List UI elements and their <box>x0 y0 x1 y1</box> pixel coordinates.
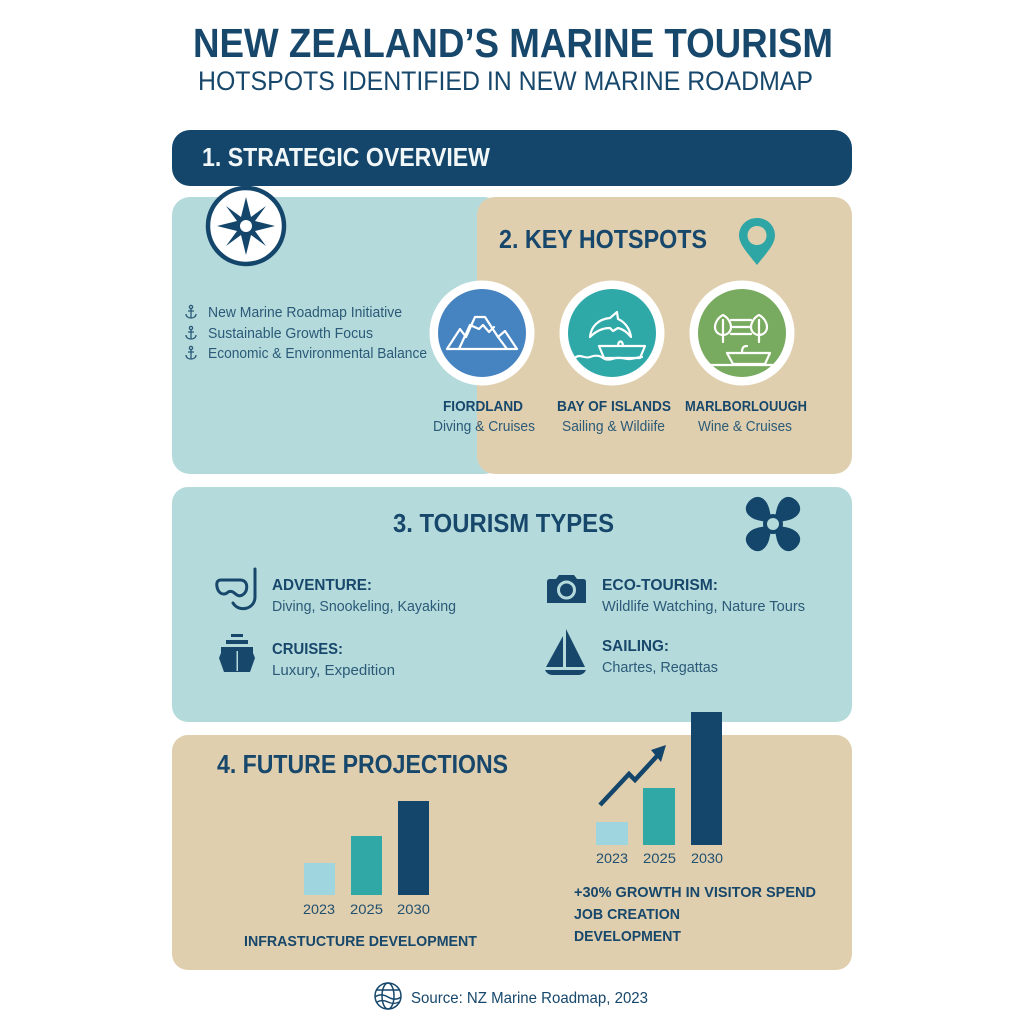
item: cruises <box>219 634 395 679</box>
hotspot: Marlborough: Wine & Cruises <box>698 419 792 435</box>
section header: strategic overview <box>172 130 852 186</box>
heading: key hotspots: 2. KEY HOTSPOTS <box>499 224 707 254</box>
heading: future projections: 4. FUTURE PROJECTIONS <box>217 749 508 779</box>
item: sailing: Chartes, Regattas <box>602 660 718 676</box>
bar chart: infrastructure: 2025 <box>350 901 383 917</box>
icon: camera <box>547 575 586 603</box>
bar chart: infrastructure: 2023 <box>303 901 335 917</box>
bullet: roadmap initiative: New Marine Roadmap Initiative <box>208 305 402 321</box>
icon: globe with waves <box>375 983 401 1009</box>
bar chart: visitor spend <box>596 712 723 866</box>
text block: growth outcomes: DEVELOPMENT <box>574 928 681 945</box>
item: adventure <box>217 569 456 615</box>
item: cruises: Luxury, Expedition <box>272 663 395 679</box>
icon: map pin <box>739 218 775 265</box>
hotspot: Fiordland <box>430 280 535 435</box>
text block: growth outcomes: +30% GROWTH IN VISITOR SPEND <box>574 884 816 901</box>
item: eco-tourism <box>547 575 805 615</box>
text block: growth outcomes: JOB CREATION <box>574 906 680 923</box>
title: NEW ZEALAND’S MARINE TOURISM <box>193 20 833 66</box>
item: adventure: ADVENTURE: <box>272 577 372 594</box>
bar chart: infrastructure <box>303 801 430 917</box>
text block: growth outcomes <box>574 884 816 945</box>
icon: cruise ship <box>219 634 255 672</box>
icon: propeller <box>742 493 804 555</box>
bar chart: visitor spend: 2025 <box>643 850 676 866</box>
panel: future projections <box>172 735 852 970</box>
icon: sailboat <box>545 629 586 675</box>
bar chart: visitor spend: 2030 <box>691 850 723 866</box>
hotspot: Bay of Islands <box>557 280 671 435</box>
hotspot: Fiordland: Diving & Cruises <box>433 419 535 435</box>
hotspot: Marlborough <box>685 280 807 435</box>
item: sailing: SAILING: <box>602 638 669 655</box>
caption: infrastructure development: INFRASTUCTURE DEVELOPMENT <box>244 933 477 950</box>
bullet: sustainable growth: Sustainable Growth Focus <box>208 326 373 342</box>
item: eco-tourism: ECO-TOURISM: <box>602 577 718 594</box>
hotspot: Fiordland: FIORDLAND <box>443 398 523 415</box>
item: adventure: Diving, Snookeling, Kayaking <box>272 599 456 615</box>
hotspot: Bay of Islands: BAY OF ISLANDS <box>557 398 671 415</box>
heading: tourism types: 3. TOURISM TYPES <box>393 508 614 538</box>
source line: Source: NZ Marine Roadmap, 2023 <box>411 990 648 1007</box>
icon: compass rose <box>208 188 284 264</box>
panel: key hotspots <box>430 197 852 474</box>
list: overview bullets <box>186 305 427 362</box>
panel: tourism types <box>172 487 852 722</box>
icon: snorkel mask <box>217 569 255 609</box>
hotspot: Bay of Islands: Sailing & Wildiife <box>562 419 665 435</box>
hotspot: Marlborough: MARLBORLOUUGH <box>685 398 807 415</box>
item: cruises: CRUISES: <box>272 641 343 658</box>
panel: strategic overview <box>172 197 502 474</box>
bullet: economic and environmental balance: Economic & Environmental Balance <box>208 346 427 362</box>
item: eco-tourism: Wildlife Watching, Nature Tours <box>602 599 805 615</box>
item: sailing <box>545 629 718 676</box>
bar chart: infrastructure: 2030 <box>397 901 430 917</box>
arrow: upward growth trend <box>600 745 666 805</box>
section header: strategic overview: 1. STRATEGIC OVERVIEW <box>202 142 490 172</box>
subtitle: HOTSPOTS IDENTIFIED IN NEW MARINE ROADMAP <box>198 66 813 96</box>
source line <box>375 983 648 1009</box>
bar chart: visitor spend: 2023 <box>596 850 628 866</box>
